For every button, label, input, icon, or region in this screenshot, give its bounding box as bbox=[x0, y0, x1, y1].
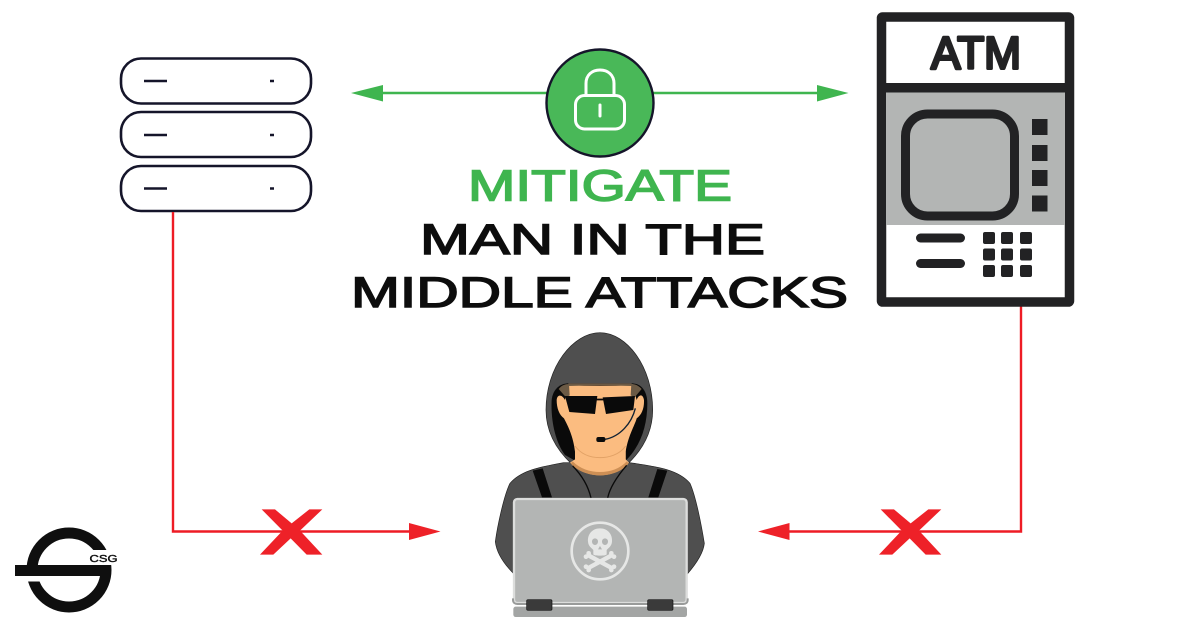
chin shadow bbox=[575, 446, 626, 458]
logo bar bbox=[15, 565, 111, 576]
ATM side buttons bbox=[1032, 119, 1048, 212]
arrow: server to attacker (red) bbox=[173, 212, 440, 540]
heading: MAN IN THE: MAN IN THE bbox=[420, 216, 765, 264]
icon: skull and crossbones bbox=[572, 523, 628, 579]
logo label: CSG bbox=[90, 554, 118, 565]
hacker neck and collar bbox=[570, 447, 629, 475]
icon: server stack bbox=[121, 58, 311, 211]
icon: hooded hacker with laptop bbox=[495, 333, 704, 617]
arrow: ATM to attacker (red) bbox=[758, 306, 1021, 540]
logo ring bbox=[32, 533, 106, 607]
icon: blocked cross right bbox=[879, 509, 941, 555]
server unit 1 bbox=[121, 58, 311, 104]
heading: MIDDLE ATTACKS: MIDDLE ATTACKS bbox=[351, 269, 848, 317]
hacker hood bbox=[546, 333, 653, 464]
logo: CSG bbox=[15, 533, 120, 607]
icon: blocked cross left bbox=[260, 509, 322, 555]
icon: ATM machine bbox=[882, 17, 1070, 302]
ATM screen bbox=[906, 114, 1014, 216]
icon: green padlock badge bbox=[546, 50, 654, 156]
ATM grey panel bbox=[886, 92, 1065, 225]
ATM card slots bbox=[916, 234, 965, 268]
hacker straps bbox=[533, 468, 667, 497]
ATM body bbox=[882, 17, 1070, 302]
hacker headset bbox=[596, 408, 635, 442]
hacker shirt lines bbox=[573, 465, 627, 498]
laptop hinges bbox=[527, 600, 673, 610]
laptop base bbox=[513, 607, 687, 617]
hair and hood edge bbox=[559, 383, 642, 397]
ATM label: ATM bbox=[931, 28, 1021, 78]
laptop lid bbox=[514, 499, 687, 603]
server unit 2 bbox=[121, 112, 311, 157]
server unit 3 bbox=[121, 166, 311, 211]
hood inner shadow bbox=[552, 383, 647, 461]
ATM keypad bbox=[983, 232, 1032, 277]
arrow: secure two-way connection (green) bbox=[351, 85, 848, 102]
hacker face bbox=[557, 386, 644, 460]
hacker body bbox=[495, 463, 704, 574]
ATM divider bbox=[886, 83, 1065, 92]
hacker sunglasses bbox=[565, 396, 635, 414]
heading: MITIGATE: MITIGATE bbox=[468, 162, 732, 210]
